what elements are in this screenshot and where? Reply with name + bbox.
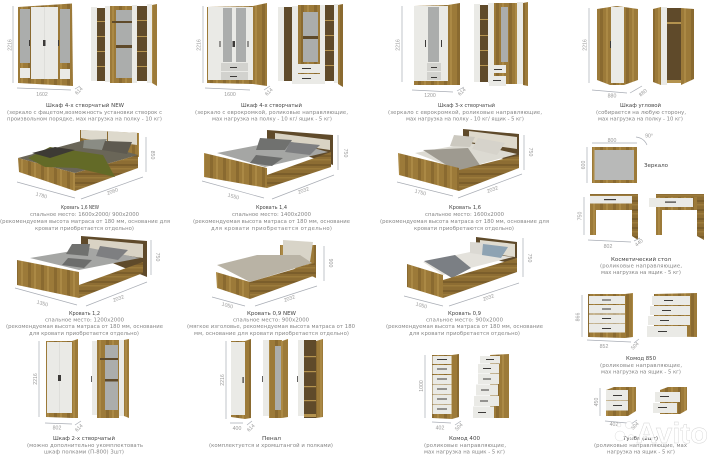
dimensions: 1000 bbox=[419, 380, 425, 392]
dimensions: 750 bbox=[526, 254, 532, 262]
dimensions bbox=[576, 295, 641, 351]
panel: dresser 400 bbox=[419, 354, 509, 456]
watermark: Avito bbox=[615, 418, 708, 450]
caption: Кровать 1,6 bbox=[449, 205, 482, 211]
dimensions: 852 bbox=[600, 344, 608, 350]
caption: Кровать 1,2 bbox=[69, 311, 100, 317]
icon: bed bbox=[18, 130, 139, 191]
icon: corner wardrobe closed bbox=[597, 6, 638, 85]
label: mirror: Зеркало bbox=[644, 163, 668, 169]
dimensions: 750 bbox=[578, 212, 584, 220]
dimensions bbox=[397, 135, 533, 198]
dimensions: 614 bbox=[74, 86, 85, 96]
caption bbox=[380, 205, 549, 232]
icon: nightstand closed bbox=[606, 387, 636, 416]
dimensions bbox=[582, 8, 649, 100]
caption: нагрузка на ящик - 5 кг) bbox=[607, 450, 675, 456]
icon: wardrobe open bbox=[278, 4, 343, 87]
caption: (рекомендуемая высота матраса от 180 мм, основание bbox=[6, 324, 163, 330]
caption bbox=[388, 102, 542, 122]
dimensions: 2060 bbox=[106, 187, 119, 197]
caption: (рекомендуемая высота матраса от 180 мм, основание bbox=[193, 219, 350, 225]
icon: wardrobe closed bbox=[18, 4, 73, 86]
caption: мах нагрузка на ящик - 5 кг) bbox=[601, 370, 681, 376]
dimensions: 2216 bbox=[33, 373, 39, 385]
icon: bed bbox=[17, 236, 147, 298]
dimensions: 614 bbox=[246, 423, 257, 433]
caption: мах нагрузка на полку - 10 кг) bbox=[598, 116, 683, 122]
dimensions: 2032 bbox=[112, 294, 125, 304]
caption: спальное место: 1400х2000 bbox=[232, 212, 312, 218]
panel: bed 1.4 bbox=[193, 130, 350, 232]
dimensions: 402 bbox=[436, 426, 444, 432]
caption: мах нагрузка на полку - 10 кг/ ящик - 5 кг) bbox=[406, 116, 524, 122]
panel: bed 1.2 bbox=[6, 236, 163, 337]
dimensions: 1600 bbox=[224, 92, 236, 98]
caption bbox=[386, 311, 543, 337]
dimensions: 1050 bbox=[415, 302, 428, 310]
icon: wardrobe closed bbox=[414, 3, 460, 85]
panel: bed 0.9 NEW bbox=[187, 240, 356, 337]
dimensions: 2032 bbox=[297, 186, 310, 196]
panel: bed 1.6 bbox=[380, 129, 549, 232]
panel: nightstand bbox=[594, 387, 687, 456]
icon: wardrobe open bbox=[91, 4, 157, 86]
icon: table closed bbox=[590, 194, 638, 240]
icon: bed bbox=[216, 240, 316, 299]
dimensions: 1200 bbox=[424, 93, 436, 99]
dimensions bbox=[419, 355, 465, 432]
dimensions: 504 bbox=[454, 422, 465, 432]
caption: Комод 850 bbox=[626, 356, 657, 362]
dimensions: 2216 bbox=[8, 39, 14, 51]
caption: произвольном порядке, мах нагрузка на полку - 10 кг) bbox=[7, 116, 162, 122]
caption: (роликовые направляющие, мах bbox=[594, 443, 687, 449]
caption bbox=[27, 435, 143, 456]
icon: dresser closed bbox=[588, 293, 633, 338]
caption: Кровать 1,6 NEW bbox=[61, 205, 100, 211]
caption: Шкаф 4-х створчатый NEW bbox=[46, 102, 125, 109]
dimensions: 802 bbox=[604, 244, 612, 250]
dimensions: 614 bbox=[264, 87, 275, 97]
panel: mirror bbox=[581, 134, 668, 183]
caption: (роликовые направляющие, bbox=[424, 443, 506, 449]
caption bbox=[7, 102, 162, 122]
dimensions bbox=[17, 137, 155, 200]
caption bbox=[6, 311, 163, 337]
caption: Кровать 0,9 NEW bbox=[247, 311, 297, 317]
dimensions bbox=[404, 238, 532, 310]
caption: Шкаф 4-х створчатый bbox=[241, 102, 302, 109]
dimensions: 750 bbox=[527, 148, 533, 156]
icon: corner wardrobe open bbox=[653, 7, 694, 85]
caption: (комплектуется и хромштангой и полками) bbox=[209, 442, 333, 449]
caption bbox=[187, 311, 356, 337]
dimensions: 2216 bbox=[196, 39, 202, 51]
panel: corner wardrobe bbox=[582, 6, 694, 122]
panel: wardrobe 2-door bbox=[27, 339, 143, 456]
caption: мах нагрузка на ящик - 5 кг) bbox=[424, 450, 505, 456]
dimensions: 2032 bbox=[283, 294, 296, 304]
dimensions: 1750 bbox=[414, 189, 427, 197]
dimensions: 2216 bbox=[582, 39, 588, 51]
caption: (зеркало с фацетом,возможность установки створок с bbox=[7, 110, 162, 116]
dimensions: 614 bbox=[74, 423, 85, 433]
caption: для кровати приобретается отдельно) bbox=[29, 331, 139, 337]
dimensions bbox=[33, 341, 85, 433]
icon: cabinet open with shelves bbox=[297, 339, 323, 418]
caption bbox=[195, 102, 348, 122]
caption: Пенал bbox=[262, 436, 281, 442]
dimensions: 402 bbox=[610, 422, 618, 428]
icon: wardrobe closed bbox=[207, 3, 267, 86]
dimensions: 400 bbox=[233, 426, 241, 432]
dimensions: 900 bbox=[327, 259, 333, 267]
icon: Avito dots bbox=[615, 422, 634, 441]
dimensions: 750 bbox=[154, 253, 160, 261]
icon: bed bbox=[407, 237, 517, 298]
caption: Косметический стол bbox=[611, 256, 671, 263]
dimensions: 802 bbox=[53, 426, 61, 432]
dimensions bbox=[202, 135, 348, 201]
dimensions: 866 bbox=[576, 313, 582, 321]
caption: мм, основание для кровати приобретается отдельно) bbox=[194, 331, 349, 337]
dimensions bbox=[220, 341, 257, 433]
dimensions bbox=[8, 6, 85, 98]
icon: cabinet open with rod bbox=[262, 339, 288, 418]
caption bbox=[596, 102, 686, 122]
caption: (роликовые направляющие, bbox=[600, 264, 682, 270]
icon: wardrobe open bbox=[91, 339, 129, 418]
dimensions: 1050 bbox=[221, 302, 234, 310]
caption: Кровать 0,9 bbox=[448, 311, 482, 317]
dimensions bbox=[15, 240, 160, 308]
caption: Комод 400 bbox=[449, 436, 481, 442]
caption: спальное место: 1600х2000/ 900х2000 bbox=[30, 212, 140, 218]
caption: (можно дополнительно укомплектовать bbox=[27, 443, 143, 449]
caption: кровати приобретается отдельно) bbox=[35, 226, 134, 232]
dimensions: 750 bbox=[342, 149, 348, 157]
text: Avito: Avito bbox=[636, 418, 708, 450]
caption: спальное место: 1200х2000 bbox=[45, 318, 125, 324]
caption: мах нагрузка на ящик - 5 кг) bbox=[601, 270, 681, 276]
caption bbox=[600, 356, 682, 376]
caption: Тумба (2шт) bbox=[622, 436, 658, 442]
icon: bed bbox=[204, 130, 333, 188]
dimensions: 800 bbox=[608, 138, 616, 144]
dimensions: 880 bbox=[638, 88, 649, 98]
dimensions: 2032 bbox=[486, 185, 499, 195]
caption bbox=[193, 205, 350, 232]
panel: dresser 850 bbox=[576, 293, 697, 376]
icon: mirror bbox=[592, 147, 637, 183]
dimensions: 450 bbox=[594, 398, 600, 406]
panel: dressing table bbox=[578, 194, 704, 276]
dimensions bbox=[581, 134, 653, 183]
dimensions: 1350 bbox=[36, 300, 49, 308]
caption: Кровать 1,4 bbox=[256, 205, 288, 211]
icon: nightstand open bbox=[653, 387, 687, 414]
dimensions: 2216 bbox=[396, 39, 402, 51]
dimensions: 850 bbox=[149, 151, 155, 159]
caption: спальное место: 900х2000 bbox=[426, 318, 504, 324]
caption bbox=[594, 436, 687, 456]
panel: wardrobe 4-door NEW bbox=[7, 4, 162, 122]
caption bbox=[600, 256, 682, 276]
panel: wardrobe 4-door bbox=[195, 3, 348, 122]
caption: Шкаф угловой bbox=[620, 102, 661, 109]
panel: bed 1.6 NEW bbox=[0, 130, 170, 232]
dimensions bbox=[594, 388, 641, 431]
caption: Шкаф 3-х створчатый bbox=[438, 102, 495, 109]
dimensions: 2216 bbox=[220, 374, 226, 386]
caption: (мягкое изголовье, рекомендуемая высота матраса от 180 bbox=[187, 324, 356, 330]
caption: спальное место: 1600х2000 bbox=[425, 212, 505, 218]
caption: (рекомендуемая высота матраса от 180 мм, основание для bbox=[380, 219, 549, 225]
icon: wardrobe closed bbox=[46, 339, 78, 418]
icon: table open bbox=[649, 194, 704, 240]
dimensions: 1602 bbox=[36, 92, 48, 98]
dimensions: 1780 bbox=[35, 192, 48, 200]
caption: кровати приобретаются отдельно) bbox=[414, 226, 514, 232]
caption: (рекомендуемая высота матраса от 180 мм, основание bbox=[386, 324, 543, 330]
caption: (рекомендуемая высота матраса от 180 мм, основание для bbox=[0, 219, 170, 225]
caption: (роликовые направляющие, bbox=[600, 363, 682, 369]
caption: для кровати приобретается отдельно) bbox=[211, 226, 332, 232]
dimensions: 614 bbox=[457, 87, 468, 97]
dimensions: 504 bbox=[630, 421, 641, 431]
caption: шкаф полками (П-800) 3шт) bbox=[44, 450, 124, 456]
dimensions: 90° bbox=[645, 134, 653, 140]
caption: (зеркало с еврокромкой, роликовые направляющие, bbox=[195, 109, 348, 116]
caption bbox=[209, 436, 333, 449]
panel: pencil cabinet bbox=[209, 339, 333, 449]
icon: bed bbox=[398, 129, 519, 191]
dimensions bbox=[396, 6, 468, 99]
icon: dresser closed bbox=[432, 354, 459, 419]
caption: для кровати приобретается отдельно) bbox=[409, 331, 520, 337]
panel: bed 0.9 bbox=[386, 237, 543, 337]
icon: cabinet closed bbox=[231, 339, 251, 419]
caption: спальное место: 900х2000 bbox=[233, 318, 310, 324]
icon: wardrobe open bbox=[474, 2, 528, 86]
panel: wardrobe 3-door bbox=[388, 2, 542, 122]
dimensions: 600 bbox=[581, 161, 587, 169]
dimensions bbox=[212, 246, 333, 310]
caption: (собирается на любую сторону, bbox=[596, 110, 686, 116]
dimensions: 1550 bbox=[227, 193, 240, 201]
caption bbox=[0, 205, 170, 232]
caption: мах нагрузка на полку - 10 кг/ ящик - 5 кг) bbox=[212, 116, 332, 122]
dimensions bbox=[578, 197, 645, 250]
dimensions bbox=[196, 6, 275, 98]
dimensions: 2032 bbox=[482, 293, 495, 303]
icon: dresser open bbox=[473, 354, 509, 418]
caption: (зеркало с еврокромкой, роликовые направляющие, bbox=[388, 109, 542, 116]
dimensions: 504 bbox=[630, 341, 641, 351]
dimensions: 880 bbox=[608, 94, 616, 100]
caption bbox=[424, 436, 506, 456]
caption: Шкаф 2-х створчатый bbox=[53, 435, 115, 442]
icon: dresser open bbox=[647, 293, 697, 337]
dimensions: 440 bbox=[634, 238, 645, 248]
